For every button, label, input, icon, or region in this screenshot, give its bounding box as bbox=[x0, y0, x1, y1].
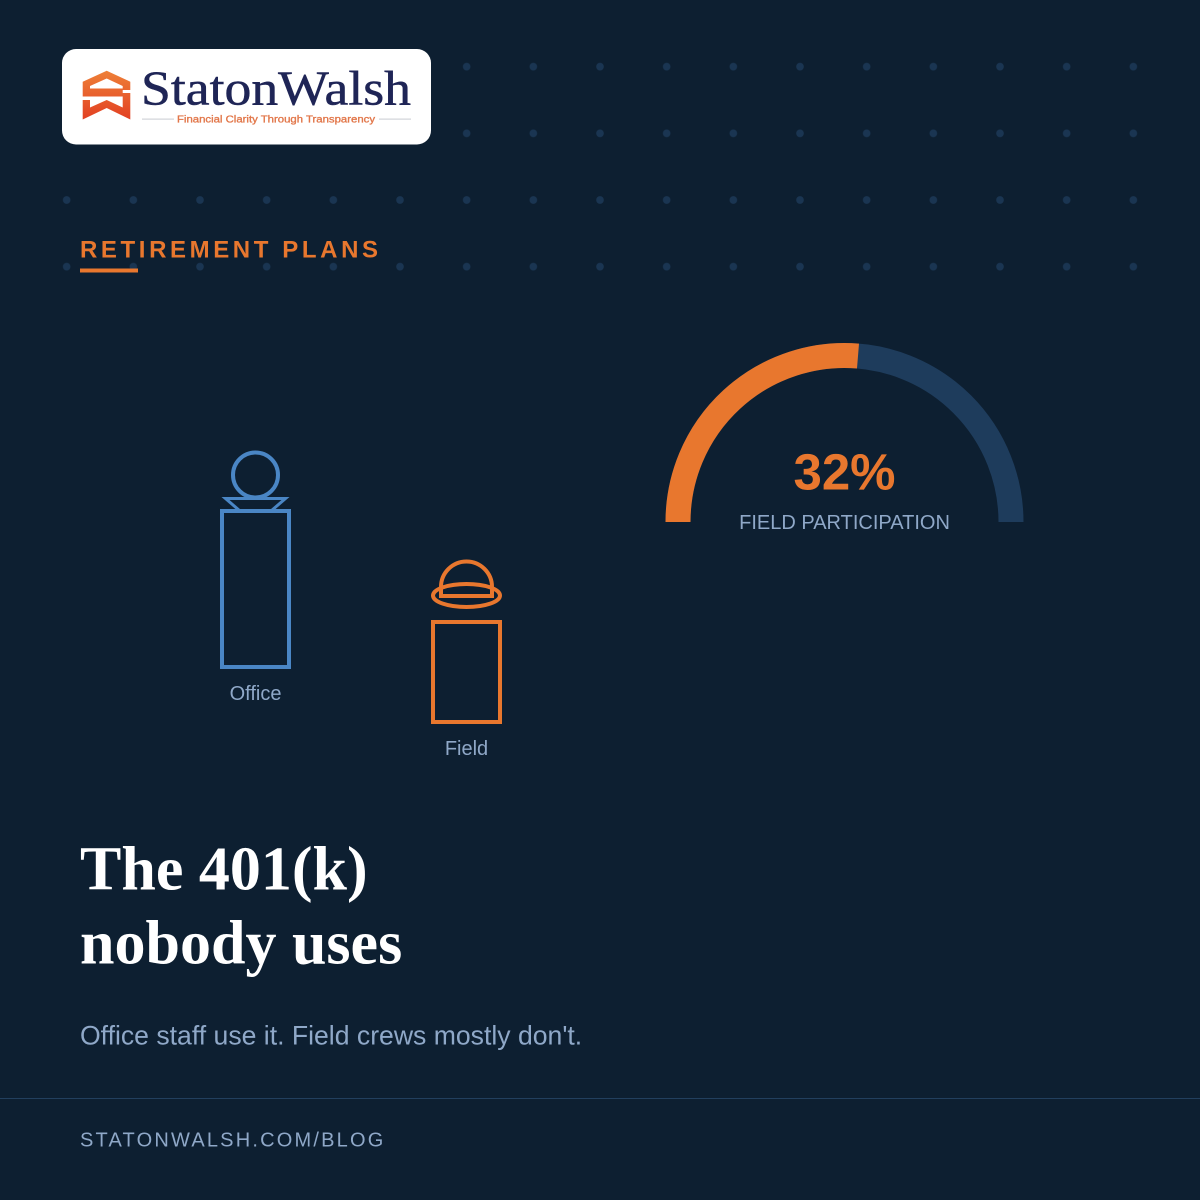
icon: office worker figure bbox=[222, 452, 289, 667]
gauge caption: FIELD PARTICIPATION bbox=[739, 512, 950, 534]
logo tagline: Financial Clarity Through Transparency bbox=[177, 114, 376, 126]
logo card bbox=[62, 49, 431, 144]
title: The 401(k) bbox=[80, 836, 368, 904]
logo wordmark: StatonWalsh bbox=[141, 62, 411, 115]
title: nobody uses bbox=[80, 910, 402, 978]
gauge value: 32% bbox=[793, 444, 896, 500]
icon: field worker figure with hard hat bbox=[433, 562, 500, 722]
field label: Field bbox=[445, 738, 488, 760]
office label: Office bbox=[230, 683, 281, 705]
footer url: STATONWALSH.COM/BLOG bbox=[80, 1130, 386, 1152]
icon: StatonWalsh house mark bbox=[82, 71, 131, 120]
gauge chart: field participation bbox=[678, 356, 1011, 534]
title bbox=[80, 836, 402, 978]
category label: RETIREMENT PLANS bbox=[80, 236, 382, 264]
subtitle: Office staff use it. Field crews mostly don't. bbox=[80, 1020, 582, 1050]
